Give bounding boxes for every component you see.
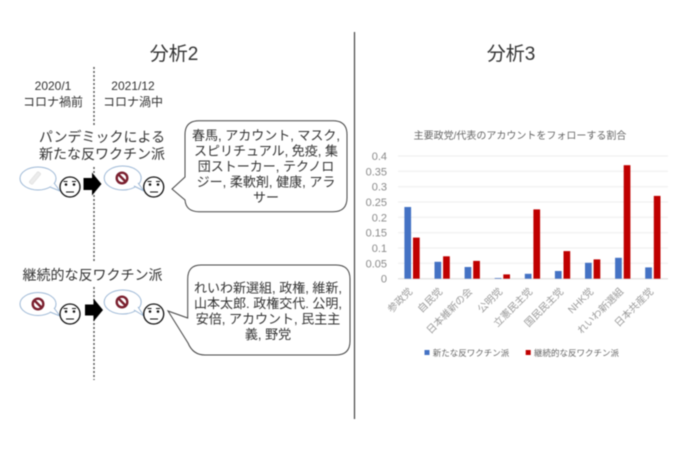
date label: during pandemic (103, 79, 163, 109)
y axis labels: 0.35 (366, 166, 387, 178)
category labels: 参政党 (385, 285, 415, 315)
arrow: row 2 (85, 298, 103, 322)
heading: 分析3: 分析3 (487, 43, 535, 65)
heading: continuing anti-vaccine group: 継続的な反ワクチン派 (22, 267, 162, 283)
icon: person with prohibition bubble, after (104, 290, 164, 324)
chart title: 主要政党/代表のアカウントをフォローする割合 (414, 129, 626, 142)
date label: before pandemic: 2020/1 (35, 79, 72, 93)
category labels: 日本共産党 (612, 285, 656, 329)
chart legend (424, 348, 620, 358)
callout: keywords for new group: スピリチュアル, 免疫, 集 (194, 144, 338, 158)
y axis labels: 0.15 (366, 228, 387, 240)
category labels: 自民党 (415, 285, 445, 315)
arrow: row 1 (84, 172, 102, 196)
callout: keywords for continuing group: 安倍, アカウント, 民主主 (196, 312, 340, 326)
icon: person with syringe bubble (20, 167, 80, 197)
category labels: 立憲民主党 (491, 285, 535, 329)
bar chart (366, 151, 668, 337)
date label: during pandemic: コロナ渦中 (103, 94, 163, 109)
category labels: NHK党 (566, 286, 596, 316)
y axis labels: 0.2 (372, 212, 387, 224)
y axis labels: 0.25 (366, 197, 387, 209)
y axis labels (366, 151, 387, 286)
heading: new anti-vaccine group: 新たな反ワクチン派 (39, 146, 165, 162)
heading: new anti-vaccine group (39, 129, 165, 162)
callout: keywords for new group: ジー, 柔軟剤, 健康, アラ (197, 174, 335, 190)
y axis labels: 0.3 (372, 182, 387, 194)
callout: keywords for continuing group (168, 265, 350, 355)
icon: person with prohibition bubble (104, 166, 164, 197)
callout: keywords for continuing group: 山本太郎. 政権交代. 公明, (194, 296, 342, 311)
date label: during pandemic: 2021/12 (111, 79, 155, 93)
y axis labels: 0.4 (372, 151, 387, 163)
red bars: continuing group (413, 165, 660, 279)
category labels: 公明党 (475, 286, 505, 315)
heading: 分析2: 分析2 (150, 43, 198, 65)
y axis labels: 0.05 (366, 258, 387, 270)
chart legend: 継続的な反ワクチン派 (534, 348, 620, 358)
callout: keywords for new group (172, 121, 347, 212)
callout: keywords for continuing group: れいわ新選組, 政権, 維新, (194, 280, 342, 296)
category labels (385, 285, 656, 337)
heading: new anti-vaccine group: パンデミックによる (39, 129, 165, 145)
category labels: れいわ新選組 (575, 285, 626, 337)
callout: keywords for new group: 団ストーカー, テクノロ (198, 159, 334, 174)
callout: keywords for continuing group: 義, 野党 (245, 327, 291, 342)
y axis labels: 0.1 (372, 243, 387, 255)
date label: before pandemic: コロナ禍前 (23, 94, 83, 109)
callout: keywords for new group: サー (253, 190, 279, 205)
category labels: 国民民主党 (522, 286, 566, 329)
date label: before pandemic (23, 79, 83, 109)
blue bars: new group (404, 207, 652, 279)
icon: person with prohibition bubble, before (20, 292, 80, 324)
chart legend: 新たな反ワクチン派 (433, 348, 510, 358)
y axis labels: 0 (381, 274, 387, 286)
callout: keywords for new group: 春馬, アカウント, マスク, (192, 128, 340, 143)
category labels: 日本維新の会 (424, 285, 475, 337)
